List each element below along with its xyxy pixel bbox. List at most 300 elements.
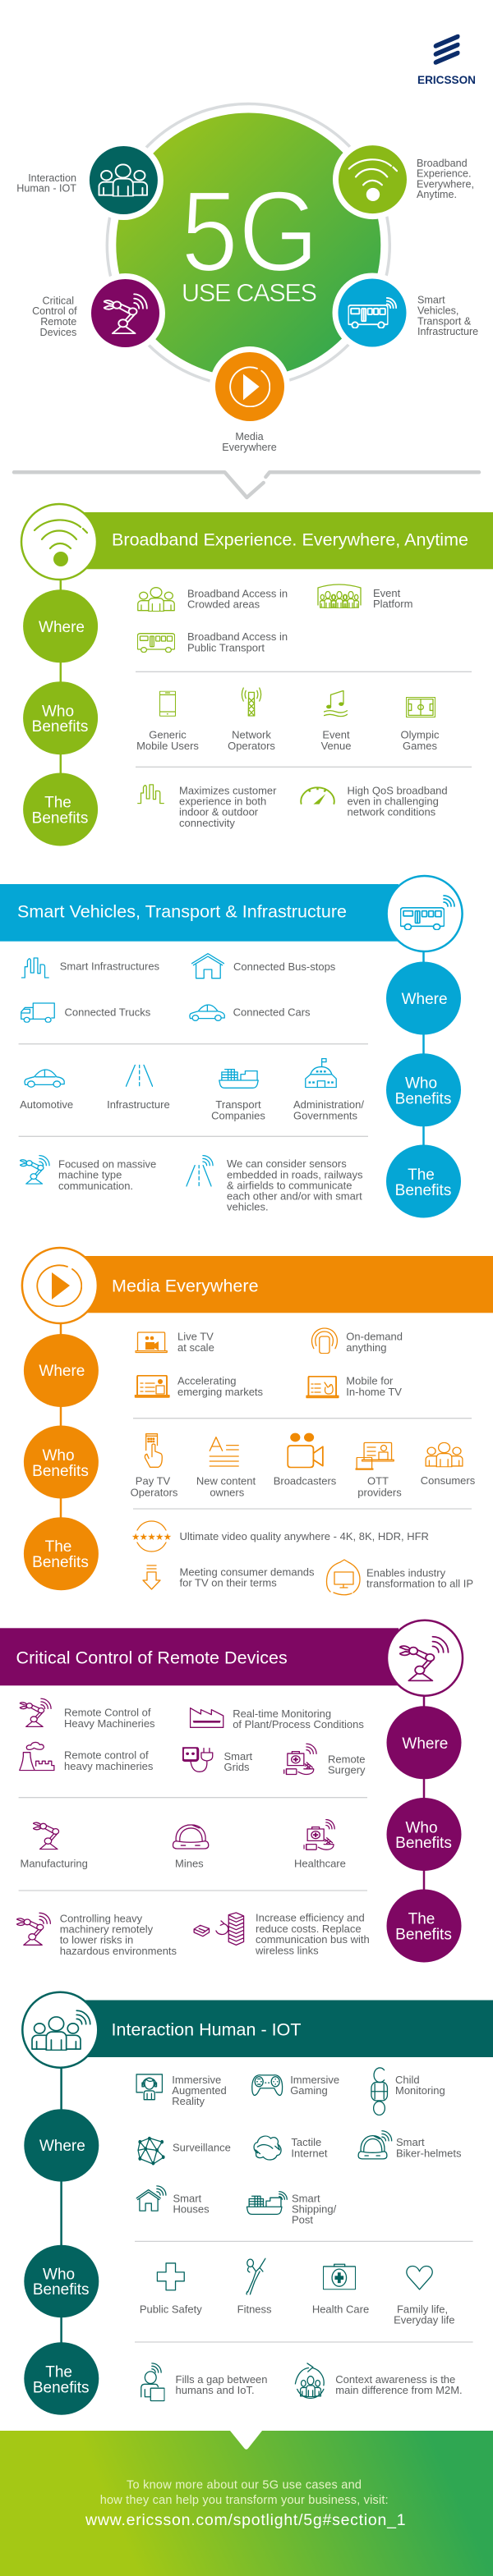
header bar [0,884,399,942]
text: QoS [347,784,448,818]
icon: skyline [138,785,164,804]
label: Critical Control of Remote Devices: Control of [32,305,77,317]
text: maximizes: experience in both [179,795,266,808]
step: the benefits: The [408,1911,435,1927]
text: mines: Mines [175,1858,204,1870]
step: where [23,589,98,662]
text: administration: Governments [293,1109,358,1121]
text: remote surgery [328,1753,366,1776]
icon: government building [306,1059,336,1088]
hero title: 5G: 5G [181,167,319,296]
text: network operators: Operators [228,740,275,752]
icon: house wireless [136,2186,166,2211]
icon: robot with wireless [20,1156,49,1184]
text: fills gap [176,2373,268,2396]
text: shipping [292,2192,337,2226]
text: emerging markets: Accelerating [177,1375,237,1387]
text: content owners: owners [210,1486,245,1498]
text: event platform: Platform [373,598,412,610]
text: event venue [321,729,351,752]
text: sensors: embedded in roads, railways [227,1168,363,1180]
text: crowded areas: Crowded areas [187,598,260,611]
text: live tv [177,1330,214,1354]
text: consumer demands: Meeting consumer demands [179,1565,315,1578]
label: Media Everywhere: Media [235,431,264,442]
step: the benefits [386,1144,461,1218]
step: who benefits: Benefits [33,2281,90,2299]
text: controlling: hazardous environments [60,1945,177,1957]
text: on-demand: On-demand [346,1330,403,1342]
footer panel [0,2431,493,2576]
hero node: Interaction Human IOT [90,146,158,214]
text: sensors: each other and/or with smart [227,1189,362,1202]
step: where [386,1706,462,1779]
step: the benefits [24,2342,99,2415]
icon: coins [194,1913,244,1945]
text: smart houses: Houses [173,2203,210,2215]
text: context awareness: Context awareness is the [335,2373,455,2386]
text: child monitoring [395,2074,445,2097]
text: fills gap: Fills a gap between [176,2373,268,2386]
icon: camera [288,1433,323,1468]
icon: truck [21,1003,54,1022]
text: content owners [196,1475,256,1498]
step: who benefits: Who [42,703,74,721]
text: network operators: Network [232,729,271,741]
text: administration: Administration/ [293,1098,364,1111]
text: on-demand [346,1330,403,1354]
icon: play [22,1248,98,1323]
icon: music note [324,690,348,717]
logo: Ericsson [417,34,476,86]
panel: Critical Control [0,1620,463,1962]
text: augmented reality: Reality [172,2095,205,2107]
text: surveillance: Surveillance [173,2141,231,2153]
step: where [24,1334,99,1407]
step: the benefits: The [45,2364,72,2381]
heading: Media Everywhere [112,1276,259,1295]
panel: Smart Vehicles [0,876,463,1218]
step: who benefits [23,681,98,754]
panel: Broadband Experience [21,504,493,846]
step: who benefits: Benefits [395,1835,452,1852]
text: pay tv: Pay TV [136,1475,171,1487]
step: the benefits [24,1517,99,1590]
text: augmented reality: Augmented [172,2084,227,2097]
step: where: Where [39,1363,85,1380]
text: trucks: Connected Trucks [64,1006,151,1019]
text: augmented reality: Immersive [172,2074,221,2086]
connector [422,944,425,1149]
text: sensors: We can consider sensors [227,1157,347,1170]
icon: event platform [318,584,361,608]
text: remote surgery: Surgery [328,1764,366,1776]
text: sensors: & airfields to communicate [227,1179,352,1191]
icon: road [126,1065,153,1086]
text: biker helmets [396,2136,462,2160]
step: the benefits: Benefits [395,1182,451,1199]
text: monitoring: of Plant/Process Conditions [233,1718,364,1730]
footer text: To know more about our 5G use cases and [127,2479,362,2492]
text: gaming [290,2074,339,2097]
text: cars: Connected Cars [233,1006,311,1018]
text: all ip: Enables industry [366,1566,446,1579]
text: live tv: Live TV [177,1330,214,1342]
text: efficiency [255,1912,370,1956]
hero node: Critical Control [91,279,159,347]
icon: cross [157,2263,184,2290]
step: the benefits: Benefits [395,1926,452,1944]
panel: Media Everywhere [22,1248,493,1595]
icon: remote [145,1434,162,1467]
step: the benefits: Benefits [32,809,88,827]
text: child monitoring: Monitoring [395,2084,445,2097]
hero: 5G use cases circle [84,103,412,427]
hero node: Media Everywhere [215,352,284,421]
icon: crowd [138,588,174,612]
step: the benefits: The [45,1538,71,1556]
text: consumers: Consumers [421,1474,476,1487]
text: focused [58,1157,156,1192]
icon: laptop presenter [135,1376,169,1397]
text: controlling [60,1912,177,1957]
connector [423,1691,425,1896]
icon: gamepad [252,2075,283,2095]
text: generic mobile users: Generic [149,729,187,741]
heading: Broadband Experience. Everywhere, Anytime [112,529,468,549]
text: context awareness: main difference from M2M. [335,2384,463,2396]
text: family life: Everyday life [394,2314,455,2326]
text: smart infrastructures: Smart Infrastructures [60,960,160,972]
text: event platform: Event [373,587,401,599]
step: the benefits: The [44,795,71,811]
step: where [24,2109,99,2182]
icon: five stars: ★★★★★ [131,1531,172,1542]
text: all ip: transformation to all IP [366,1578,473,1590]
label: Smart Vehicles [417,295,478,337]
text: administration [293,1098,364,1121]
text: mobile tv: Mobile for [346,1375,394,1387]
text: all ip [366,1566,473,1590]
icon: consumers [426,1442,463,1467]
footer text: www.ericsson.com/spotlight/5g#section_1 [85,2511,406,2529]
step: who benefits [386,1798,462,1871]
hero node: Smart Vehicles [339,279,406,346]
text: olympic games: Olympic [401,729,440,741]
step: who benefits [24,1425,99,1499]
text: controlling: to lower risks in [60,1934,133,1946]
step: where: Where [39,2138,85,2155]
text: focused: Focused on massive [58,1157,156,1170]
text: maximizes: Maximizes customer [179,784,277,796]
icon: robot wireless [16,1913,50,1945]
label: Smart Vehicles: Vehicles, [417,305,458,316]
text: smart grids: Smart [223,1750,253,1762]
icon: power plant [20,1742,54,1771]
text: shipping: Shipping/ [292,2203,337,2215]
icon: helmet wireless [358,2131,392,2159]
text: consumer demands: for TV on their terms [179,1577,277,1589]
step: where [386,962,461,1034]
text: smart houses [173,2192,210,2215]
text: emerging markets [177,1375,264,1398]
icon: ship [219,1070,258,1088]
text: transport companies: Companies [211,1109,265,1121]
footer text: how they can help you transform your business, visit: [100,2494,389,2507]
icon: bus [387,876,463,951]
text: network operators [228,729,275,752]
icon: globe tv [327,1560,360,1595]
text: remote control: Remote Control of [64,1707,151,1719]
icon: car [190,1005,224,1020]
panel: Interaction Human IOT [22,1992,493,2415]
label: Media Everywhere [222,431,277,453]
icon: wifi [21,504,97,580]
text: gaming: Gaming [290,2084,328,2097]
text: sensors: vehicles. [227,1201,269,1213]
text: event platform [373,587,412,610]
text: efficiency: wireless links [255,1944,319,1956]
text: maximizes [179,784,277,829]
text: ott providers [357,1475,402,1498]
notch arrow [230,2431,262,2450]
icon: surgery wireless [304,1820,334,1849]
heading: Critical Control of Remote Devices [16,1648,288,1667]
label: Smart Vehicles: Transport & [417,315,472,327]
text: pay tv [131,1475,178,1498]
icon: down arrow [143,1565,160,1589]
step: who benefits: Who [405,1819,438,1837]
icon: plug [182,1748,213,1772]
text: focused: communication. [58,1180,133,1192]
text: monitoring: Real-time Monitoring [233,1707,331,1720]
text: biker helmets: Biker-helmets [396,2147,462,2160]
step: the benefits [23,773,98,846]
connector [60,2065,62,2348]
label: Broadband: Broadband [417,158,468,169]
icon: robot [387,1620,463,1696]
text: sensors [227,1157,363,1213]
step: the benefits [386,1890,462,1962]
step: who benefits: Benefits [395,1090,451,1108]
text: controlling: machinery remotely [60,1923,154,1936]
label: Interaction Human IOT: Interaction [28,172,76,184]
text: mobile tv: In-home TV [346,1386,402,1398]
icon: road with wireless [187,1156,213,1186]
text: live tv: at scale [177,1341,214,1354]
header bar [59,2000,493,2057]
icon: house [191,954,224,979]
text: on-demand: anything [346,1341,386,1354]
text: broadcasters: Broadcasters [274,1475,337,1487]
text: heavy machineries [64,1749,154,1772]
text: pay tv: Operators [131,1486,178,1498]
label: Broadband: Everywhere, [417,179,474,190]
text: remote surgery: Remote [328,1753,366,1765]
icon: laptop with camera [136,1332,167,1353]
step: where: Where [402,991,448,1008]
text: smart grids [223,1750,253,1773]
text: olympic games [401,729,440,752]
icon: car [25,1070,64,1087]
connector [60,1318,62,1527]
text: generic mobile users [136,729,199,752]
text: emerging markets: emerging markets [177,1386,264,1398]
text: content owners: New content [196,1475,256,1487]
step: the benefits: The [408,1167,435,1184]
text: context awareness [335,2373,463,2396]
text: event venue: Venue [321,740,351,752]
step: who benefits: Benefits [32,718,88,736]
label: Broadband [417,158,474,200]
text: crowded areas: Broadband Access in [187,588,288,600]
icon: people wireless [22,1992,98,2068]
icon: person with screen [141,2363,164,2401]
text: tactile internet: Tactile [291,2136,321,2148]
text: family life [394,2303,455,2326]
header bar [0,1628,399,1685]
label: Broadband: Anytime. [417,189,457,200]
text: ultimate quality: Ultimate video quality anywhere - 4K, 8K, HDR, HFR [179,1530,429,1542]
arrow: divider pointing down [14,472,479,497]
icon: OTT [356,1442,394,1469]
text: family life: Family life, [397,2303,448,2316]
text: ott providers: OTT [367,1475,389,1487]
text: controlling: Controlling heavy [60,1912,143,1924]
text: fitness: Fitness [237,2303,272,2316]
text: infrastructure: Infrastructure [107,1098,170,1111]
text: olympic games: Games [403,740,437,752]
hero subtitle: use cases: USE CASES [182,279,317,307]
label: Interaction Human IOT [16,172,76,195]
step: where: Where [39,619,85,636]
step: the benefits: Benefits [33,2379,90,2397]
icon: tactile [254,2136,281,2160]
text: child monitoring: Child [395,2074,420,2086]
icon: on-demand [312,1328,337,1354]
step: who benefits [386,1053,461,1126]
step: the benefits: Benefits [32,1554,89,1571]
text: tactile internet: Internet [291,2147,328,2160]
text: fills gap: humans and IoT. [176,2384,255,2396]
text: health care: Health Care [312,2303,369,2316]
text: ott providers: providers [357,1486,402,1498]
icon: fitness [246,2258,265,2296]
icon: tower [242,688,261,716]
step: who benefits [24,2245,99,2317]
icon: health kit [323,2264,356,2290]
text: QoS: network conditions [347,806,436,818]
text: crowded areas [187,588,288,611]
text: automotive: Automotive [20,1098,73,1111]
label: Interaction Human IOT: Human - IOT [16,183,76,195]
heading: Smart Vehicles, Transport & Infrastructure [17,902,347,922]
icon: factory [191,1708,223,1727]
text: remote control [64,1707,155,1730]
text: biker helmets: Smart [396,2136,425,2148]
icon: heart [407,2267,432,2290]
icon: child [371,2068,387,2115]
step: who benefits: Who [42,1447,75,1464]
header bar [59,512,493,569]
icon: robot wireless [20,1698,51,1726]
label: Smart Vehicles: Infrastructure [417,326,478,337]
text: heavy machineries: heavy machineries [64,1760,154,1772]
text: focused: machine type [58,1169,122,1181]
icon: laptop touch [306,1377,339,1398]
icon: helmet [173,1825,209,1849]
header bar [59,1256,493,1313]
text: efficiency: reduce costs. Replace [256,1923,362,1935]
text: efficiency: communication bus with [256,1933,370,1946]
icon: people in ring [295,2363,324,2398]
logo: Ericsson: ERICSSON [417,73,476,86]
icon: robot [33,1822,59,1849]
icon: gauge [301,787,334,804]
text: efficiency: Increase efficiency and [256,1912,365,1924]
text: public transport: Broadband Access in [187,630,288,643]
label: Critical Control of Remote Devices: Critical [43,296,74,307]
text: shipping: Smart [292,2192,320,2205]
text: public transport: Public Transport [187,641,265,653]
text: generic mobile users: Mobile Users [136,740,199,752]
text: gaming: Immersive [290,2074,339,2086]
text: QoS: High QoS broadband [347,784,448,796]
text: smart houses: Smart [173,2192,202,2205]
icon: bus [137,634,175,653]
label: Broadband: Experience. [417,167,472,179]
icon: augmented reality [136,2074,162,2100]
connector [60,575,62,773]
step: where: Where [402,1735,448,1753]
text: mobile tv [346,1375,402,1398]
text: remote control: Heavy Machineries [64,1717,155,1730]
label: Critical Control of Remote Devices: Remote [40,316,76,328]
text: manufacturing: Manufacturing [20,1858,88,1870]
step: who benefits: Who [405,1075,437,1092]
text: public transport [187,630,288,653]
footer text [85,2479,406,2529]
text: transport companies [211,1098,265,1121]
text: QoS: even in challenging [347,795,439,808]
step: who benefits: Who [43,2267,75,2284]
label: Smart Vehicles: Smart [417,295,445,306]
icon: ship wireless [246,2192,287,2214]
step: who benefits: Benefits [32,1463,89,1480]
text: bus stops: Connected Bus-stops [233,960,336,973]
text: transport companies: Transport [215,1098,261,1111]
label: Media Everywhere: Everywhere [222,442,277,453]
text: event venue: Event [322,729,350,741]
text: tactile internet [291,2136,328,2160]
text: consumer demands [179,1565,315,1589]
heading: Interaction Human - IOT [112,2019,301,2039]
icon: network [138,2137,165,2166]
text: monitoring [233,1707,364,1730]
text: healthcare: Healthcare [294,1858,346,1870]
text: maximizes: indoor & outdoor [179,806,259,818]
icon: phone [159,691,176,716]
label: Critical Control of Remote Devices: Devices [40,327,76,338]
hero node: Broadband [339,145,407,213]
icon: content text [210,1437,238,1466]
label: Critical Control of Remote Devices [32,296,77,338]
text: heavy machineries: Remote control of [64,1749,149,1762]
text: shipping: Post [292,2213,313,2226]
icon: skyline [21,958,48,978]
icon: five stars [131,1521,172,1552]
text: augmented reality [172,2074,227,2107]
